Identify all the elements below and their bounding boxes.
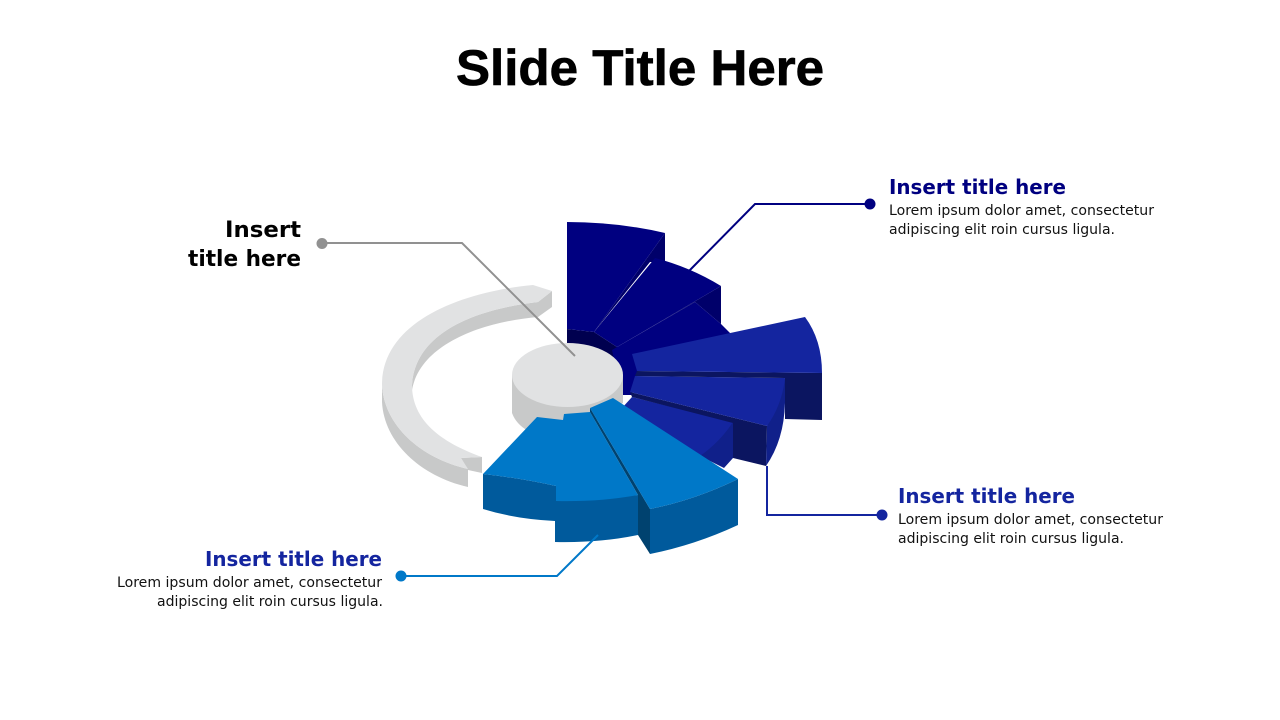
callout: gray	[188, 218, 575, 356]
callout: navy	[689, 175, 1154, 271]
callout: gray: title here	[188, 247, 301, 272]
callout: navy: adipiscing elit roin cursus ligula.	[889, 222, 1115, 238]
title: Slide Title Here	[456, 40, 824, 96]
callout: light blue	[117, 535, 598, 610]
callout: light blue: adipiscing elit roin cursus ligula.	[157, 594, 383, 610]
callout: royal blue: Insert title here	[898, 484, 1075, 508]
pie segment group: navy	[567, 222, 731, 395]
pie segment group: royal blue	[622, 317, 822, 468]
callout: gray: Insert	[225, 218, 301, 243]
callout: light blue: Lorem ipsum dolor amet, consectetur	[117, 575, 382, 591]
callout: royal blue: adipiscing elit roin cursus ligula.	[898, 531, 1124, 547]
icon: centre disc	[512, 343, 623, 431]
icon: circular arrow ring	[382, 285, 552, 487]
callout: navy: Insert title here	[889, 175, 1066, 199]
callout: royal blue: Lorem ipsum dolor amet, consectetur	[898, 512, 1163, 528]
pie segment group: light blue	[483, 398, 738, 554]
callout: navy: Lorem ipsum dolor amet, consectetur	[889, 203, 1154, 219]
callout: light blue: Insert title here	[205, 547, 382, 571]
callout: royal blue	[767, 466, 1163, 547]
